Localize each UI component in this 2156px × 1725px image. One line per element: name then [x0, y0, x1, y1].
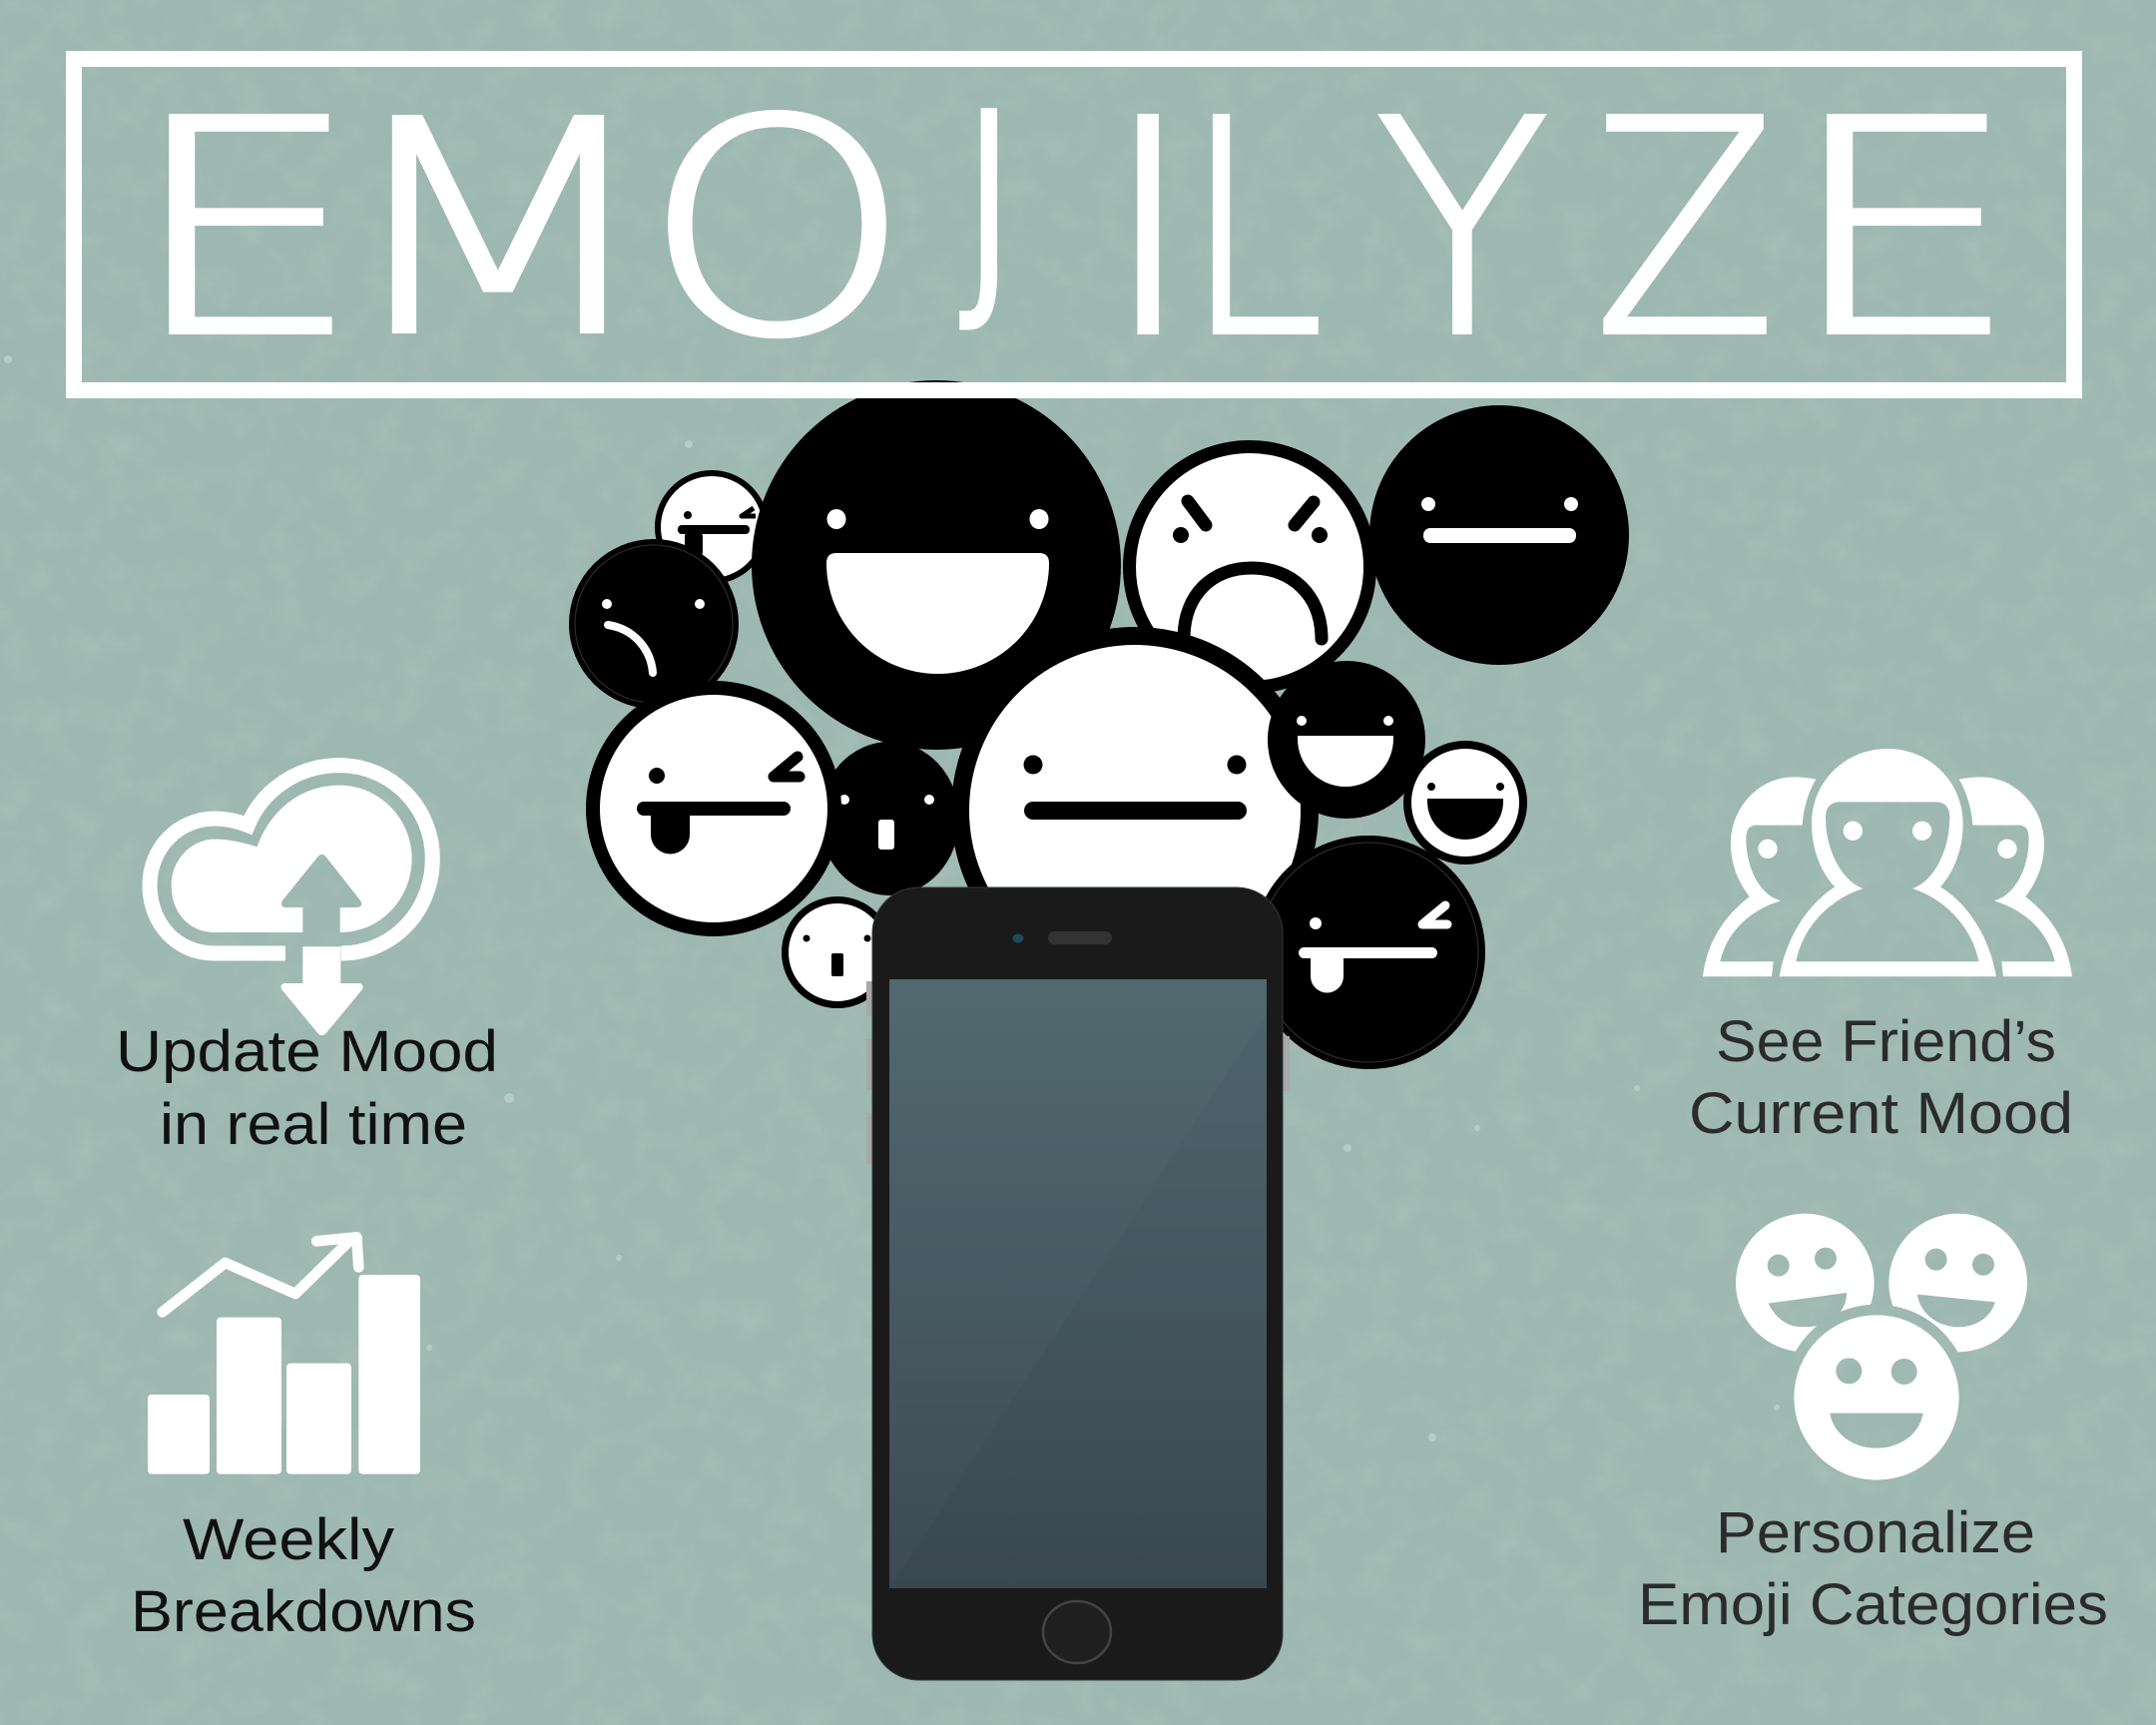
title: I — [1104, 58, 1193, 401]
label: weekly breakdowns: Weekly — [183, 1507, 394, 1572]
title frame — [74, 59, 2074, 390]
icon: group of friends — [1703, 749, 2072, 976]
label: weekly breakdowns — [131, 1507, 476, 1644]
emoji: small black grin — [1268, 661, 1425, 819]
label: weekly breakdowns: Breakdowns — [131, 1579, 476, 1644]
emoji: white wink tongue out — [593, 688, 834, 929]
label: update mood: in real time — [160, 1092, 467, 1157]
phone speaker — [1048, 931, 1112, 944]
title: E — [128, 58, 361, 401]
phone screen — [889, 979, 1267, 1588]
title: J — [962, 67, 1016, 338]
emoji: small white open mouth — [785, 900, 890, 1004]
label: update mood — [116, 1019, 498, 1157]
title: Z — [1594, 58, 1776, 401]
label: see friend's current mood — [1689, 1009, 2073, 1146]
emoji cluster — [569, 380, 1629, 1069]
label: personalize emoji categories: Personalize — [1716, 1500, 2035, 1565]
label: see friend's current mood: See Friend’s — [1716, 1009, 2056, 1074]
label: personalize emoji categories: Emoji Categories — [1638, 1572, 2108, 1637]
emoji: black wink tongue out — [1252, 836, 1485, 1069]
emoji: black neutral — [1369, 405, 1629, 665]
emoji: large white neutral — [960, 636, 1310, 985]
label: update mood: Update Mood — [116, 1019, 498, 1084]
icon: rising bar chart — [148, 1237, 420, 1474]
phone home button — [1043, 1601, 1111, 1663]
icon: cloud sync — [150, 766, 432, 1035]
emoji: small black open mouth — [819, 742, 959, 895]
title: O — [644, 58, 910, 401]
emoji: large black grin — [752, 380, 1121, 750]
title: L — [1185, 58, 1324, 401]
emoji: small white tongue out — [658, 473, 766, 581]
phone camera — [1012, 934, 1024, 942]
title — [128, 58, 2019, 401]
label: see friend's current mood: Current Mood — [1689, 1081, 2073, 1146]
phone body — [872, 887, 1283, 1680]
title: Y — [1376, 58, 1548, 401]
smartphone — [866, 887, 1290, 1680]
phone side buttons — [866, 981, 1290, 1164]
title: E — [1786, 58, 2019, 401]
emoji: small white grin — [1407, 745, 1523, 861]
title: M — [333, 58, 663, 401]
icon: three smiley faces — [1736, 1214, 2027, 1480]
emoji: black frown — [569, 539, 739, 709]
label: personalize emoji categories — [1638, 1500, 2108, 1637]
emoji: angry white — [1130, 447, 1369, 687]
